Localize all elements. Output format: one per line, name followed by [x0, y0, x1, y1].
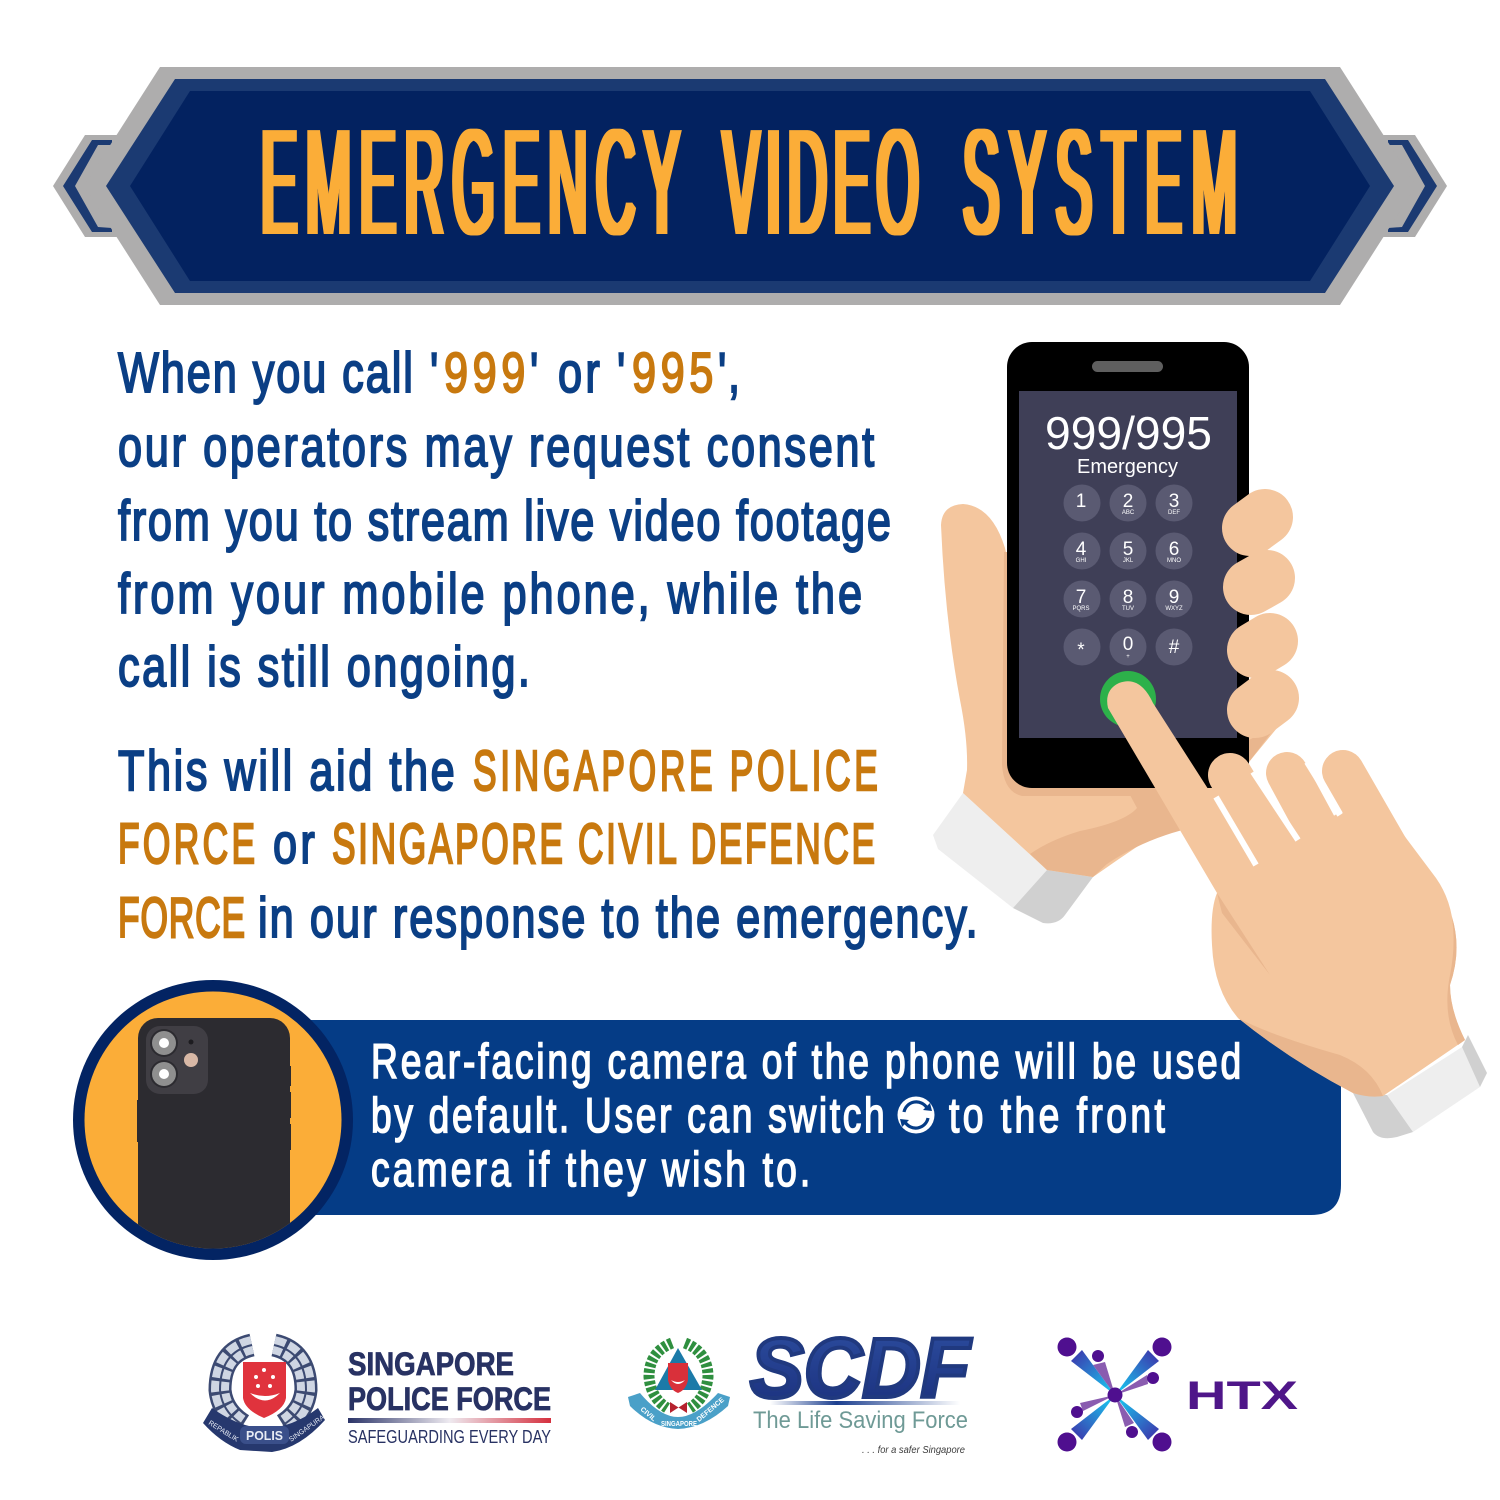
SCDF wordmark: SCDF [750, 1321, 973, 1415]
SCDF crest: DEFENCE [696, 1396, 726, 1424]
keypad: DEF [1168, 510, 1180, 516]
second paragraph [118, 738, 978, 950]
keypad: # [1169, 637, 1180, 658]
keypad: MNO [1167, 558, 1181, 564]
keypad: 4 [1076, 539, 1087, 560]
SCDF crest: CIVIL [639, 1406, 657, 1423]
right chevron [1380, 135, 1447, 237]
keypad: 5 [1123, 539, 1133, 560]
SCDF wordmark: . . . for a safer Singapore [862, 1445, 965, 1456]
title text [261, 98, 1237, 267]
banner text: Rear-facing camera of the phone will be used [371, 1035, 1241, 1089]
intro paragraph: or [558, 340, 600, 404]
illustration: right hand pressing call [1107, 681, 1487, 1138]
second paragraph: FORCE [118, 887, 245, 950]
red shield [243, 1362, 286, 1418]
keypad: JKL [1123, 558, 1134, 564]
hand shadow [1217, 893, 1465, 1097]
HTX mark [1058, 1338, 1172, 1452]
banner text: to the front [949, 1089, 1165, 1143]
second paragraph: SINGAPORE POLICE [473, 740, 878, 803]
dialled number: 999/995 [1045, 407, 1212, 459]
title banner [53, 67, 1447, 305]
crest text: POLIS [246, 1428, 283, 1443]
intro paragraph [118, 340, 891, 698]
keypad: 9 [1169, 587, 1179, 608]
banner text: by default. User can switch [371, 1089, 885, 1143]
icon: switch camera [898, 1096, 934, 1134]
keypad: + [1126, 654, 1130, 660]
hand and fingers [1107, 681, 1465, 1097]
keypad: 7 [1076, 587, 1086, 608]
camera note banner [213, 1020, 1341, 1215]
call button [1100, 671, 1156, 727]
police wordmark: SAFEGUARDING EVERY DAY [348, 1427, 551, 1447]
intro paragraph: ' [617, 340, 625, 404]
keypad: TUV [1122, 606, 1134, 612]
rear camera phone medallion [73, 980, 353, 1278]
keypad: * [1077, 640, 1085, 661]
banner text: camera if they wish to. [371, 1143, 810, 1197]
intro paragraph: ' [530, 340, 538, 404]
second paragraph: or [273, 811, 315, 875]
ribbon [203, 1408, 325, 1452]
intro paragraph: When you call [118, 340, 413, 404]
intro paragraph: from you to stream live video footage [118, 488, 891, 552]
HTX wordmark: HTX [1186, 1374, 1298, 1418]
police wordmark [348, 1346, 551, 1447]
keypad: WXYZ [1165, 606, 1183, 612]
wreath [220, 1345, 306, 1425]
title text: SYSTEM [963, 98, 1237, 267]
cuff [1353, 1035, 1487, 1138]
banner text [371, 1035, 1241, 1197]
logo: HTX [1058, 1338, 1298, 1452]
finger gaps [1216, 797, 1256, 865]
intro paragraph: our operators may request consent [118, 414, 874, 478]
keypad: ABC [1122, 510, 1135, 516]
cuff [933, 793, 1093, 923]
speaker [1092, 361, 1163, 372]
title text: VIDEO [723, 98, 919, 267]
keypad: 2 [1123, 491, 1133, 512]
keypad: 6 [1169, 539, 1179, 560]
title text: EMERGENCY [261, 98, 680, 267]
keypad: 0 [1123, 634, 1133, 655]
police crest: REPABLIK [207, 1420, 240, 1444]
palm and thumb [941, 504, 1277, 877]
second paragraph: in our response to the emergency. [258, 885, 978, 949]
police crest: SINGAPURA [288, 1414, 326, 1444]
keypad: 3 [1169, 491, 1179, 512]
second paragraph: FORCE [118, 813, 255, 876]
intro paragraph: ' [430, 340, 438, 404]
left chevron [53, 135, 120, 237]
palm shadow [1002, 552, 1277, 877]
intro paragraph: ', [718, 340, 740, 404]
wrapped fingers [1250, 517, 1271, 710]
intro paragraph: call is still ongoing. [118, 634, 530, 698]
screen [1019, 391, 1237, 738]
second paragraph: SINGAPORE CIVIL DEFENCE [332, 813, 875, 876]
police crest [203, 1345, 326, 1452]
emergency label: Emergency [1077, 456, 1178, 478]
second paragraph: This will aid the [118, 738, 455, 802]
logo: Singapore Police Force [203, 1345, 551, 1452]
keypad: 8 [1123, 587, 1133, 608]
ribbon [628, 1393, 730, 1429]
keypad: PQRS [1072, 606, 1090, 612]
icon: phone rear [137, 1018, 291, 1248]
illustration: left hand holding phone [933, 342, 1277, 923]
keypad [1064, 484, 1192, 666]
police wordmark: POLICE FORCE [348, 1381, 551, 1417]
phone [1007, 342, 1249, 788]
SCDF crest: SINGAPORE [661, 1421, 697, 1428]
intro paragraph: from your mobile phone, while the [118, 561, 862, 625]
SCDF wordmark: The Life Saving Force [753, 1407, 968, 1434]
intro paragraph: 999 [444, 340, 525, 404]
intro paragraph: 995 [632, 340, 713, 404]
SCDF wordmark [750, 1321, 973, 1456]
logo: SCDF [628, 1321, 973, 1456]
SCDF crest [628, 1343, 730, 1429]
keypad: 1 [1076, 491, 1086, 512]
keypad: GHI [1076, 558, 1087, 564]
police wordmark: SINGAPORE [348, 1346, 514, 1382]
